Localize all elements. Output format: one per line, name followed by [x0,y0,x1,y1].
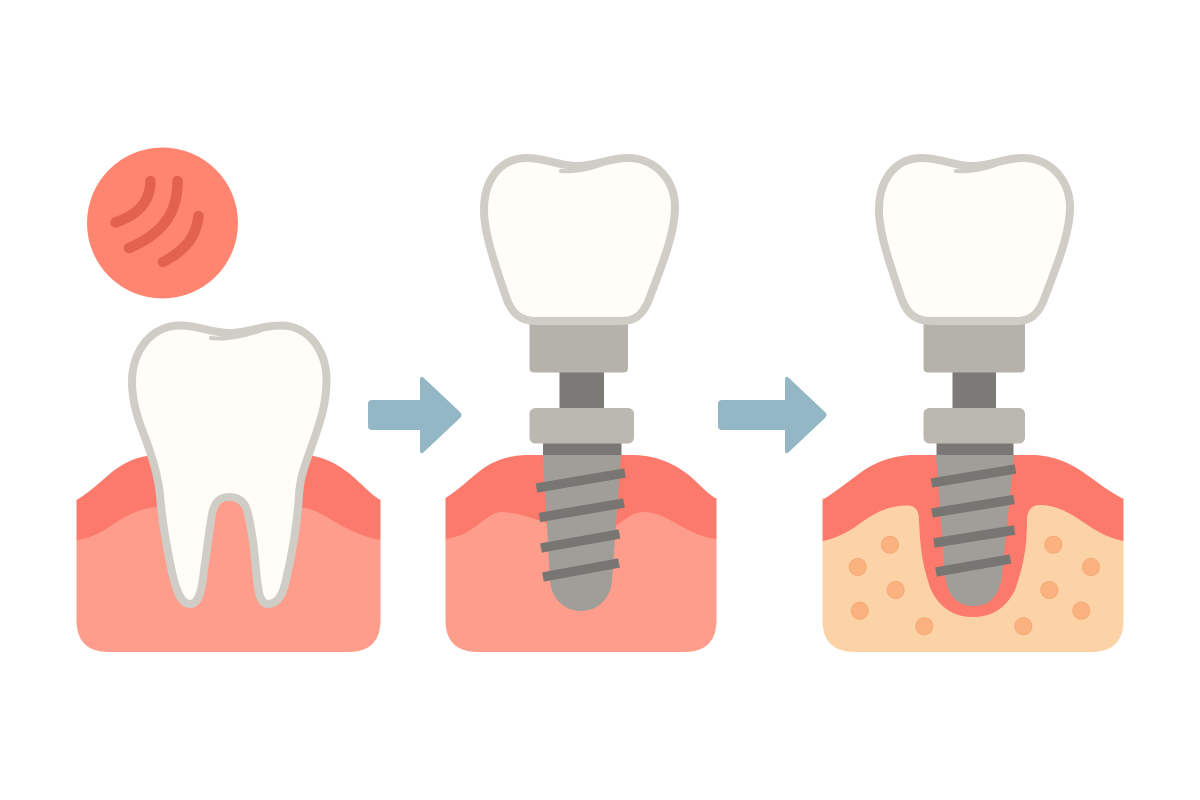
implant [530,322,634,611]
crown [879,158,1070,321]
icon: inflammation circle [87,148,238,298]
implant body [543,455,621,611]
arrow: step one to two [368,377,462,453]
panel: natural tooth in gum [76,326,380,652]
gum around implant [822,455,1124,617]
implant neck band [543,443,622,455]
abutment post [952,370,996,410]
implant neck band [936,443,1014,455]
panel: implant placed in gum [446,158,716,652]
inflamed gum [446,455,716,539]
arrow: step two to three [718,377,826,453]
implant body [936,455,1014,606]
implant [924,322,1025,606]
abutment collar [924,322,1025,372]
crown [484,158,675,321]
implant platform [530,408,634,444]
implant platform [924,408,1025,444]
bone particles [849,536,1100,635]
implant threads [536,473,625,577]
implant threads [932,469,1016,572]
tooth [132,326,327,604]
gum base [76,500,380,652]
panel: integrated implant in bone [822,158,1124,652]
gum between roots [200,495,256,600]
gum base [446,498,716,652]
abutment post [560,370,604,410]
bone base [822,498,1124,652]
inflamed gum [76,455,380,540]
abutment collar [530,322,628,372]
